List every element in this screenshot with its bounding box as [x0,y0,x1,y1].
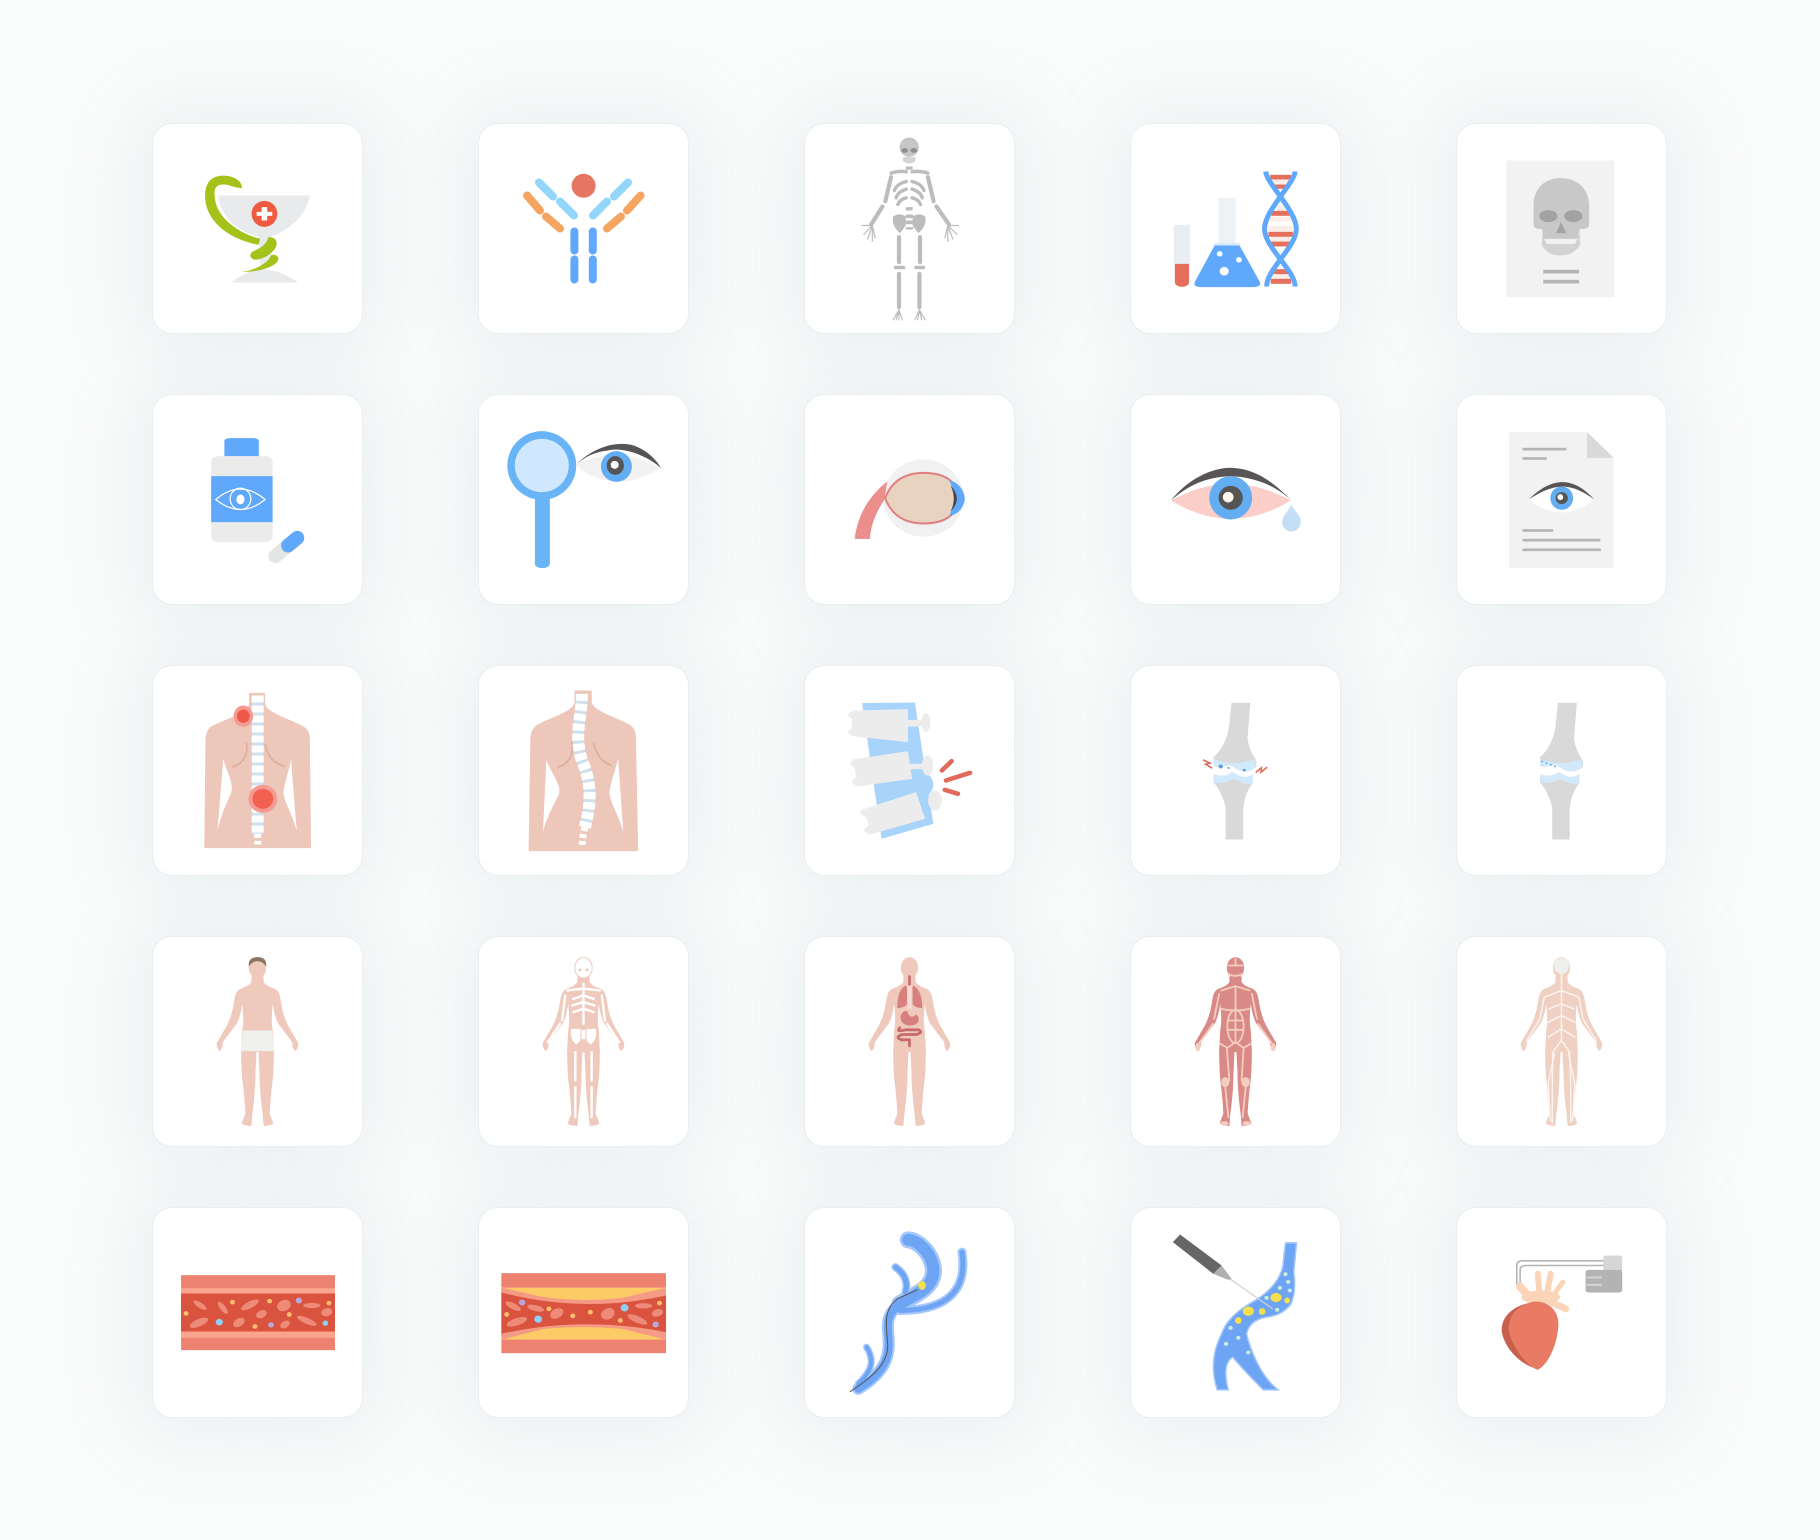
stent balloon [918,1281,926,1289]
pacemaker device [1586,1255,1622,1292]
optic nerve [855,481,887,538]
hair [249,957,266,966]
icon: herniated disc [848,702,972,839]
hands and feet [862,225,959,319]
icon: knee joint with pain [1202,702,1268,840]
cartilage [1214,758,1256,783]
icon: eye medicine bottle [211,438,304,563]
panel: pharmacy bowl card [153,124,362,332]
icon: body with skeleton [542,957,624,1126]
flask [1194,197,1260,287]
eye [576,443,661,481]
panel: herniated disc card [805,666,1014,874]
panel: eye report card [1457,394,1666,604]
knees and hands [1195,1043,1276,1125]
sclera [1171,483,1291,518]
iris [1209,476,1252,519]
icon: eyeball cross section [854,460,965,539]
trachea and esophagus [908,975,911,1008]
panel: knee card [1457,666,1666,874]
white cells [519,1299,659,1327]
pain rays [942,761,970,793]
icon: back with pain spots [204,692,311,848]
icon: skull x-ray document [1506,160,1614,297]
icon: magnifier and eye [507,431,661,568]
blue stems [574,231,593,279]
curved spine [578,693,590,846]
heart back [1502,1302,1537,1368]
catheter wire [850,1289,918,1391]
artery wall [501,1273,666,1353]
eyelid [1171,467,1291,500]
panel: clogged artery card [479,1208,688,1416]
eye [1529,482,1594,512]
intestines [898,1027,921,1045]
needle [1230,1278,1273,1308]
spine blocks [906,166,913,210]
pain spots [234,705,277,812]
panel: pacemaker card [1457,1208,1666,1416]
body silhouette [217,957,298,1125]
panel: scoliosis card [479,666,688,874]
brain [1554,957,1569,973]
artery wall [181,1275,335,1350]
icon: lab glassware and dna [1174,171,1299,288]
icon: knee joint [1540,702,1583,840]
pelvis [571,1028,596,1044]
dna rungs [1268,174,1293,283]
skull [575,957,592,978]
antigen [572,173,596,197]
panel: eye medicine card [153,394,362,604]
panel: human body card [153,936,362,1146]
icon: skeleton [862,138,960,320]
bottom fatty deposit [501,1324,666,1339]
panel: antibody card [479,124,688,332]
muscle silhouette [1195,957,1276,1125]
vessel inner [858,1239,963,1388]
body silhouette [869,957,950,1125]
yellow particles [1235,1292,1290,1323]
icon: eye report document [1510,432,1614,568]
panel: organs card [805,936,1014,1146]
bones [548,983,619,1117]
panel: catheter card [805,1208,1014,1416]
icon: heart with pacemaker [1502,1256,1622,1370]
heart front [1509,1301,1558,1369]
page [1509,432,1614,568]
pacemaker leads [1517,1260,1604,1284]
disc column [862,702,933,838]
heart vessels [1521,1290,1560,1303]
spine [252,695,263,844]
torso [204,692,311,848]
light chains inner [539,182,628,215]
snake [205,175,278,271]
limb bones [871,177,949,307]
vessel outer [858,1239,963,1388]
test tube [1174,224,1190,286]
damage spots [1219,764,1246,771]
x-ray sheet [1506,160,1614,297]
skull [900,137,919,163]
cartilage [1540,758,1582,783]
label eye [216,488,265,509]
panel: vessel injection card [1131,1208,1340,1416]
icon: body with organs [868,957,950,1126]
skull [1534,178,1589,255]
panel: eye anatomy card [805,394,1014,604]
icon: bowl of hygieia [205,176,310,282]
femur [1214,702,1256,767]
heart vessel branches [1520,1273,1566,1308]
retina and vitreous [885,472,959,523]
caption lines [1543,269,1579,283]
pelvis [893,214,926,233]
pain bolts [1203,759,1267,772]
panel: muscular system card [1131,936,1340,1146]
sclera [883,459,964,536]
icon: scoliosis back [528,690,638,852]
red cross badge [252,200,277,226]
bottle [211,438,273,542]
pale particles [1224,1272,1292,1354]
icon: artery with plaque [501,1273,666,1354]
torso bones [891,171,928,204]
tendons [1199,958,1272,1117]
panel: healthy artery card [153,1208,362,1416]
icon: antibody [523,174,645,284]
text lines [1522,447,1601,551]
icon: body with nerves [1520,957,1602,1126]
gap [1540,765,1582,776]
icon: male body [216,957,298,1126]
panel: eye examination card [479,394,688,604]
body silhouette [543,976,624,1125]
tibia [1540,775,1579,839]
vertebrae [848,709,942,834]
panel: lab and dna card [1131,124,1340,332]
capsule [275,537,297,556]
panel: skeletal system card [479,936,688,1146]
panel: nervous system card [1457,936,1666,1146]
body silhouette [1521,957,1602,1125]
white cells [216,1297,328,1327]
panel: painful knee card [1131,666,1340,874]
panel: back pain card [153,666,362,874]
damage spots [1541,760,1556,767]
lumen [501,1290,666,1335]
tibia [1214,775,1253,839]
stomach [901,1011,919,1025]
icon: body with muscles [1194,957,1276,1126]
icon: teary red eye [1171,468,1301,532]
dna light rungs [1268,179,1293,278]
platelets [504,1300,662,1322]
panel: red eye card [1131,394,1340,604]
icon: injection into blood vessel [1172,1234,1298,1391]
platelets [184,1298,331,1328]
nerves [1527,973,1596,1122]
gap [1214,765,1256,776]
icon: catheter in blood vessel [850,1231,968,1395]
red blood cells [188,1297,334,1330]
top fatty deposit [501,1287,666,1303]
orange chains outer [527,195,641,228]
syringe [1173,1234,1232,1279]
vessel [1213,1242,1297,1389]
icon: healthy artery [181,1275,335,1350]
goblet [218,195,310,282]
femur [1540,702,1583,767]
dna strands [1265,171,1296,286]
panel: skull x-ray card [1457,124,1666,332]
underwear [241,1030,274,1051]
red blood cells [504,1299,664,1328]
lungs [897,985,922,1008]
magnifying glass [507,431,576,568]
tear drop [1282,504,1301,531]
panel: skeleton card [805,124,1014,332]
cornea and iris [949,480,965,515]
torso [529,690,638,851]
